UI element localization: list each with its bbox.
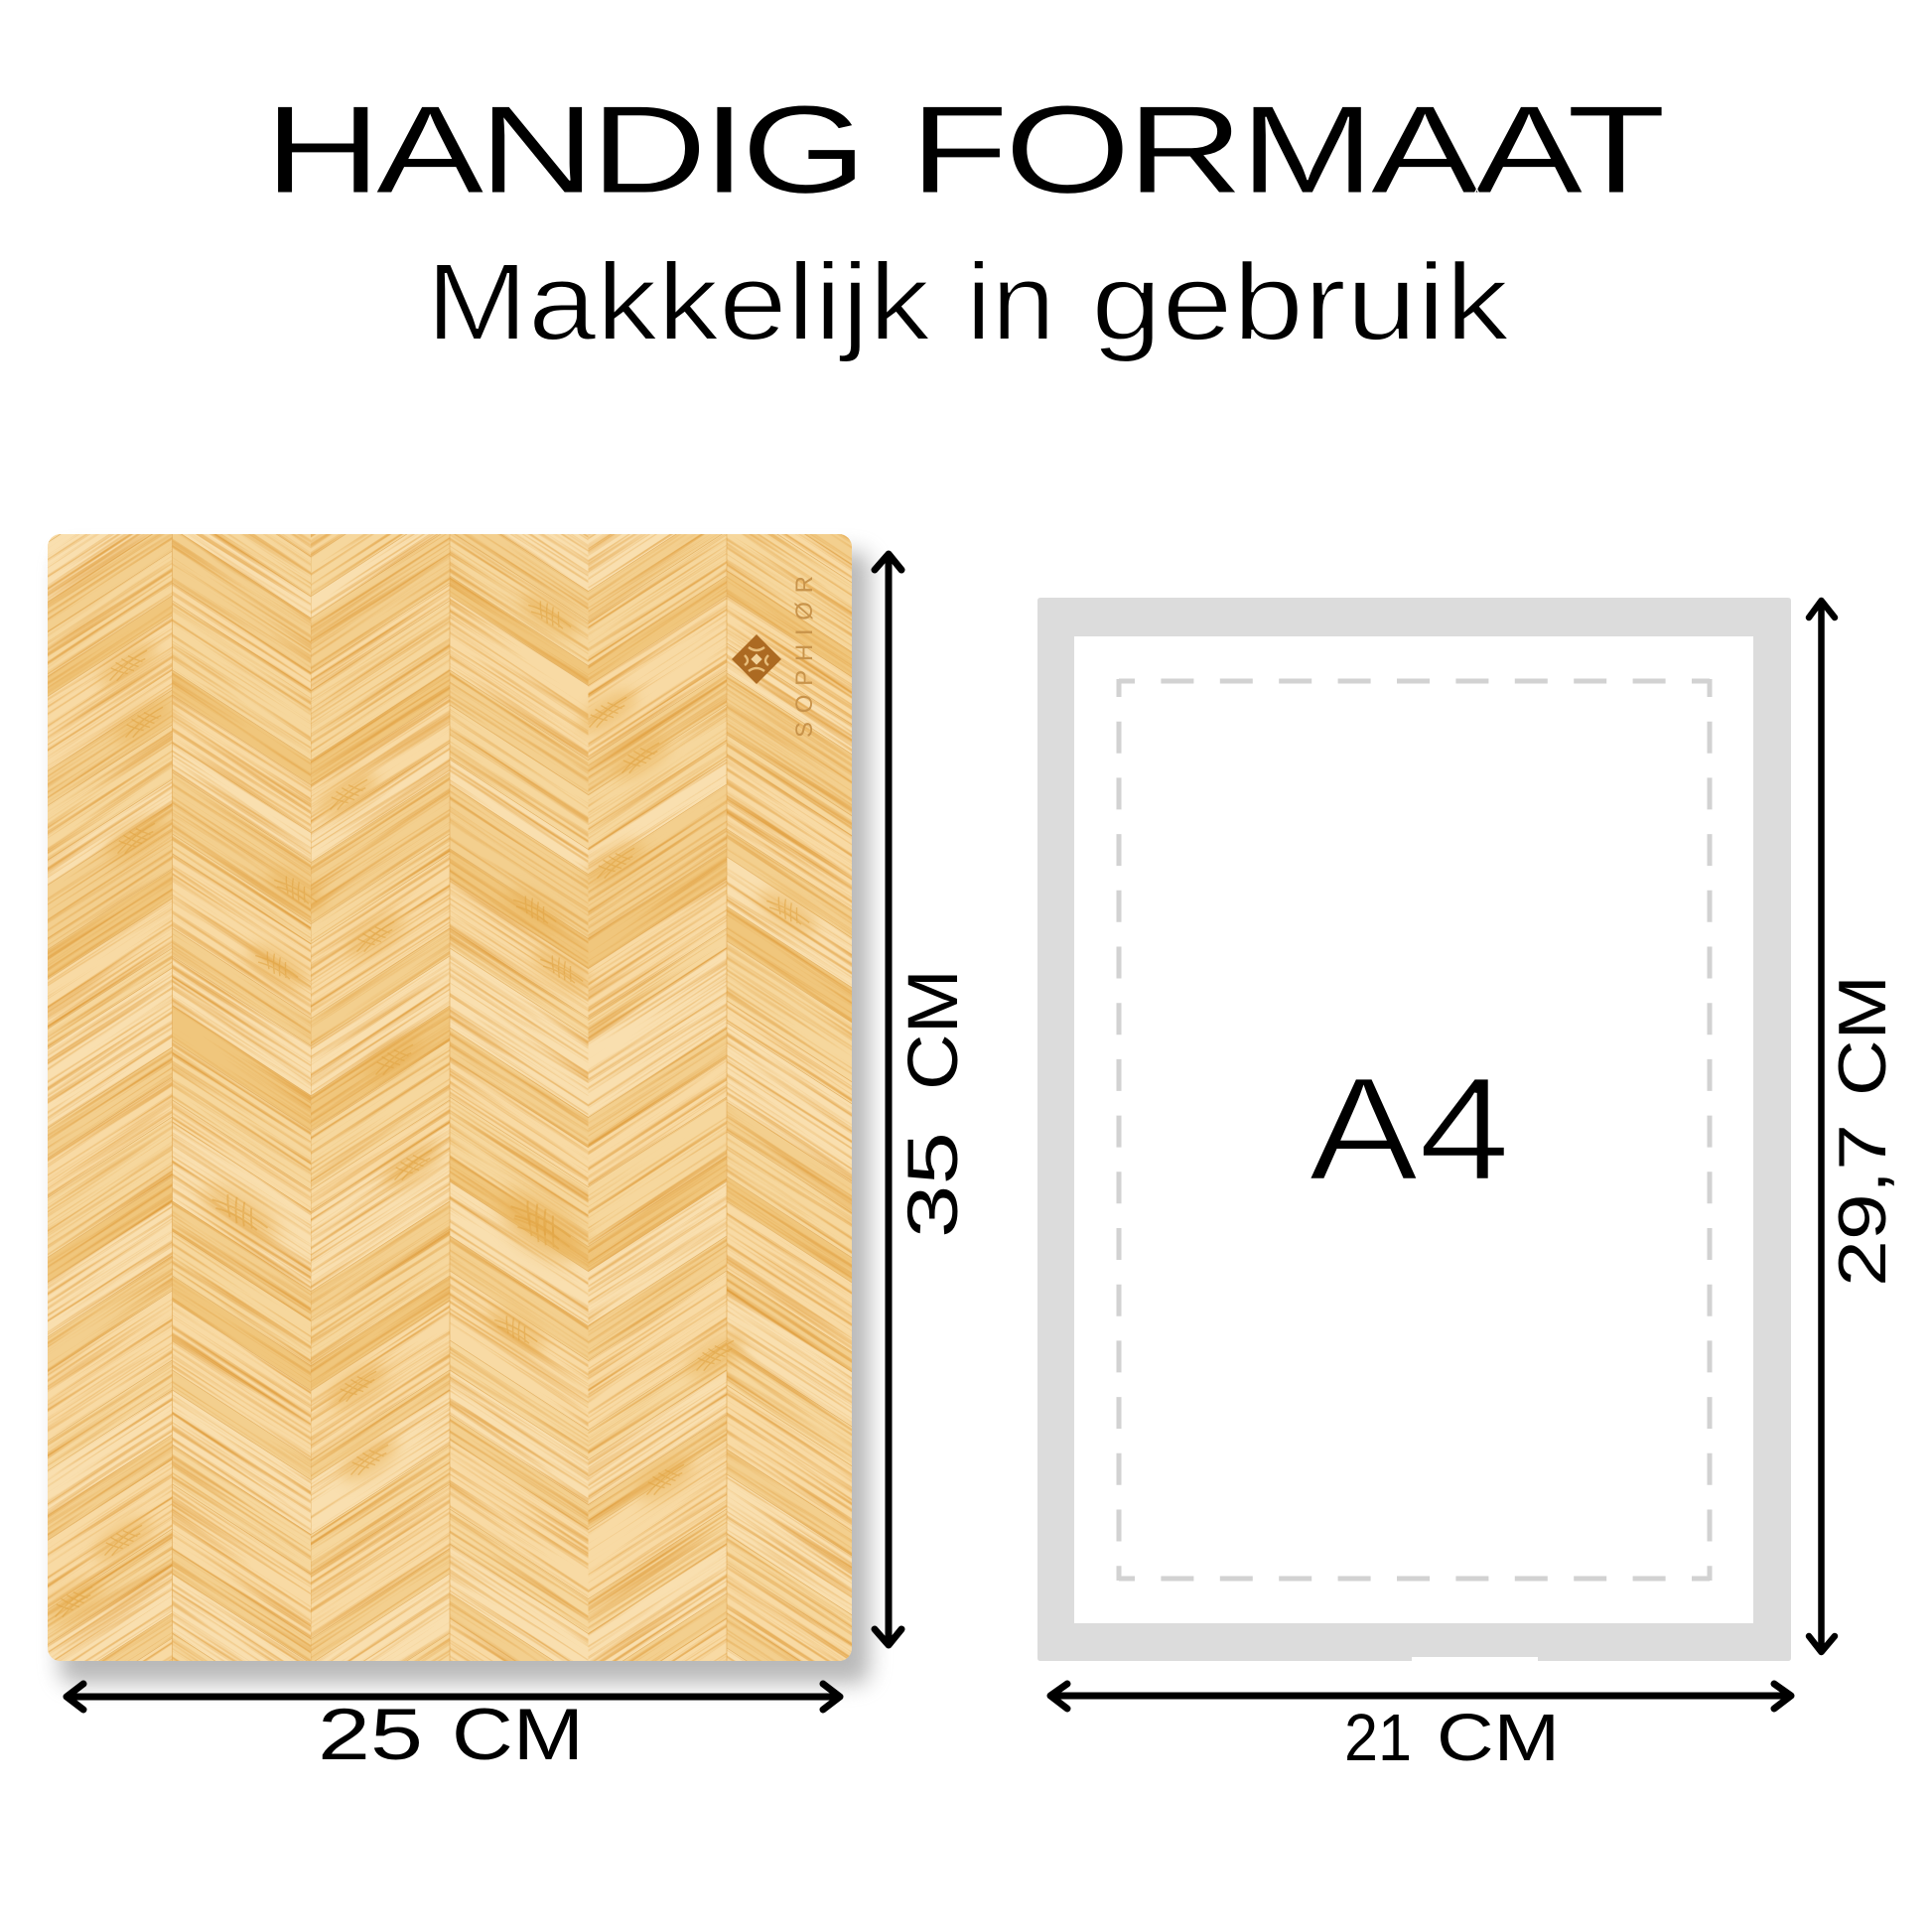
column 4 of chevron pattern — [450, 534, 588, 1661]
board drop shadow — [60, 552, 870, 1684]
label: 25 cm — [318, 1695, 584, 1775]
label: 35 cm: 35 — [895, 1132, 973, 1238]
label: 29,7 cm — [1825, 975, 1900, 1287]
label: 35 cm: CM — [895, 969, 973, 1090]
panel: A4 paper outline — [1037, 598, 1791, 1662]
column 5 of chevron pattern — [588, 534, 727, 1661]
column 6 of chevron pattern — [727, 534, 852, 1661]
label: 25 cm: CM — [452, 1695, 584, 1775]
arrow: board height — [875, 554, 901, 1645]
title: FORMAAT — [909, 79, 1662, 219]
subtitle — [426, 241, 1510, 363]
subtitle: gebruik — [1091, 241, 1510, 363]
dashed A4 outline — [1119, 679, 1710, 1581]
label: 29,7 cm: CM — [1825, 975, 1900, 1096]
icon: engraved logo — [732, 634, 781, 684]
label: 21 cm: CM — [1437, 1701, 1560, 1775]
subtitle: in — [966, 241, 1055, 363]
label: 21 cm — [1344, 1701, 1560, 1775]
title — [264, 79, 1662, 219]
subtitle: Makkelijk — [426, 241, 931, 363]
label: 35 cm — [895, 969, 973, 1238]
column 1 of chevron pattern — [48, 534, 173, 1661]
label: 21 cm: 21 — [1344, 1701, 1412, 1775]
label: 25 cm: 25 — [318, 1695, 423, 1775]
arrow: A4 width — [1050, 1684, 1791, 1709]
grey frame — [1037, 598, 1791, 1661]
bamboo knots — [37, 585, 825, 1632]
title: HANDIG — [264, 79, 862, 219]
panel: bamboo cutting board — [48, 534, 852, 1661]
brand text: SOPHIØR — [791, 576, 818, 738]
A4 label: A4 — [1309, 1047, 1510, 1211]
arrow: A4 height — [1809, 601, 1835, 1652]
column 3 of chevron pattern — [311, 534, 450, 1661]
column 2 of chevron pattern — [173, 534, 311, 1661]
label: 29,7 cm: 29,7 — [1825, 1124, 1900, 1287]
arrow: board width — [67, 1684, 840, 1710]
